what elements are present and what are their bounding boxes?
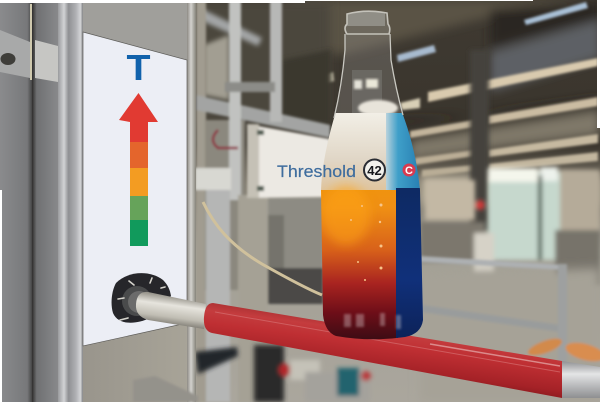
machine framing [195, 0, 330, 402]
bracket [133, 376, 198, 402]
glass neck [336, 12, 402, 113]
badge: 42: 42 [367, 163, 382, 178]
orange to red liquid [318, 190, 398, 340]
bottle lip [345, 11, 390, 34]
dial knob [112, 273, 171, 323]
silver pipe [136, 292, 206, 329]
blue label layer [386, 113, 420, 190]
threshold label [277, 160, 416, 181]
arrow: colour scale [119, 93, 158, 246]
threshold label: Threshold [277, 162, 356, 181]
icon: letter T: T [126, 47, 150, 88]
badge: C: C [405, 165, 413, 177]
factory background [190, 0, 600, 402]
foam layer [321, 113, 386, 190]
column [470, 50, 489, 230]
ceiling lights [281, 2, 598, 177]
lower machinery [195, 345, 371, 402]
far window [420, 167, 600, 285]
bottle [318, 8, 426, 340]
bolt icon [0, 53, 16, 65]
control box with sign [247, 124, 330, 198]
brushed metal panel [83, 0, 196, 402]
floor and railing [420, 256, 600, 402]
silver pipe end [562, 361, 600, 398]
navy liquid [396, 188, 423, 338]
stainless steel column [0, 0, 83, 402]
ceiling beams [290, 0, 600, 205]
threshold scale card [83, 32, 187, 346]
cable [203, 202, 322, 295]
red pipe [204, 303, 562, 398]
